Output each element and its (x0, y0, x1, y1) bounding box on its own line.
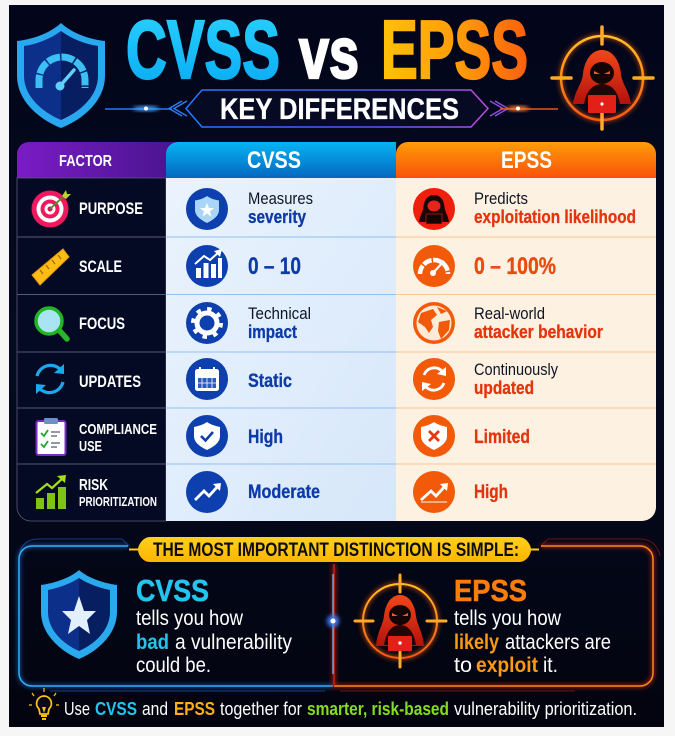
icon: calendar (186, 358, 228, 400)
row: updates: Static (248, 371, 292, 392)
icon: gauge shield (17, 23, 105, 128)
subtitle: key differences badge (105, 90, 558, 127)
title: CVSS vs EPSS: vs (299, 14, 359, 94)
panel: epss summary: it. (543, 654, 558, 677)
comparison table (17, 142, 656, 521)
row: scale: SCALE (79, 257, 122, 276)
banner: most important distinction: THE MOST IMPORTANT DISTINCTION IS SIMPLE: (153, 540, 519, 561)
panel: epss summary (334, 539, 660, 691)
row: risk prioritization: Moderate (248, 482, 320, 503)
row: focus: Technical (248, 304, 311, 323)
row: updates: updated (474, 378, 534, 398)
factor column (17, 142, 175, 521)
row: focus: impact (248, 322, 297, 342)
factor column: FACTOR (59, 153, 112, 170)
row: scale (32, 245, 556, 287)
panel: epss summary: to (454, 654, 472, 677)
panel: epss summary: EPSS (454, 573, 527, 608)
row: risk prioritization (36, 471, 508, 513)
epss column: EPSS (501, 147, 552, 174)
icon: cycle arrows (413, 358, 455, 400)
row: focus: Real-world (474, 304, 545, 323)
title: CVSS vs EPSS: EPSS (381, 3, 528, 96)
icon: light bulb (29, 688, 59, 719)
row: purpose (32, 188, 636, 230)
row: updates: Continuously (474, 360, 558, 379)
panel: cvss summary: bad (136, 631, 169, 654)
row: scale: 0 – 10 (248, 253, 301, 280)
row: purpose: exploitation likelihood (474, 207, 636, 227)
footer takeaway: Use (64, 699, 90, 719)
icon: gauge (413, 245, 455, 287)
epss column (396, 142, 656, 521)
footer takeaway: EPSS (174, 699, 215, 719)
icon: hacker in target (552, 27, 653, 129)
icon: shield check (186, 415, 228, 457)
row: updates (36, 358, 558, 400)
footer takeaway (29, 688, 637, 719)
panel: cvss summary: a vulnerability (175, 631, 292, 654)
title: CVSS vs EPSS: CVSS (126, 3, 280, 96)
row: risk prioritization: High (474, 482, 508, 503)
panel: epss summary: likely (454, 631, 499, 654)
panel: cvss summary: could be. (136, 654, 211, 677)
row: purpose: Measures (248, 189, 313, 208)
panel: cvss summary (19, 539, 333, 691)
icon: shield x (413, 415, 455, 457)
panel: cvss summary: CVSS (136, 573, 209, 608)
icon: globe (413, 302, 455, 344)
row: risk prioritization: PRIORITIZATION (79, 494, 157, 509)
cvss column (166, 142, 396, 521)
icon: trend up cvss (186, 471, 228, 513)
footer takeaway: smarter, risk-based (307, 699, 449, 719)
footer takeaway: vulnerability prioritization. (454, 699, 637, 719)
icon: star shield (41, 570, 117, 659)
row: focus: FOCUS (79, 314, 125, 333)
footer takeaway: together for (220, 699, 302, 719)
subtitle: key differences badge: KEY DIFFERENCES (220, 93, 459, 126)
icon: magnifier (36, 308, 67, 339)
footer takeaway: and (142, 699, 168, 719)
row: focus (36, 302, 603, 344)
center divider (327, 564, 339, 686)
row: compliance use: USE (79, 438, 102, 455)
icon: hacker target (355, 575, 446, 667)
icon: target (32, 190, 71, 228)
row: updates: UPDATES (79, 372, 141, 391)
cvss column: CVSS (247, 147, 301, 174)
row: purpose: PURPOSE (79, 199, 143, 218)
row: focus: attacker behavior (474, 322, 603, 342)
panel: cvss summary: tells you how (136, 607, 244, 630)
icon: cvss shield star (186, 188, 228, 230)
row: compliance use: COMPLIANCE (79, 421, 157, 438)
icon: trend up epss (413, 471, 455, 513)
row: compliance use: Limited (474, 427, 530, 448)
row: risk prioritization: RISK (79, 477, 108, 494)
icon: ruler (32, 249, 69, 285)
icon: epss hacker (413, 188, 455, 230)
icon: bar growth (186, 245, 228, 287)
row: purpose: Predicts (474, 189, 528, 208)
row: scale: 0 – 100% (474, 253, 556, 280)
icon: refresh arrows (36, 364, 64, 394)
row: purpose: severity (248, 207, 306, 227)
panel: epss summary: exploit (476, 654, 538, 677)
icon: clipboard (36, 418, 66, 455)
icon: gear (186, 302, 228, 344)
footer takeaway: CVSS (95, 699, 137, 719)
icon: green bar chart (36, 475, 66, 509)
panel: epss summary: attackers are (505, 631, 611, 654)
title: CVSS vs EPSS (126, 3, 528, 96)
panel: epss summary: tells you how (454, 607, 562, 630)
row: compliance use (36, 415, 530, 457)
row: compliance use: High (248, 427, 283, 448)
